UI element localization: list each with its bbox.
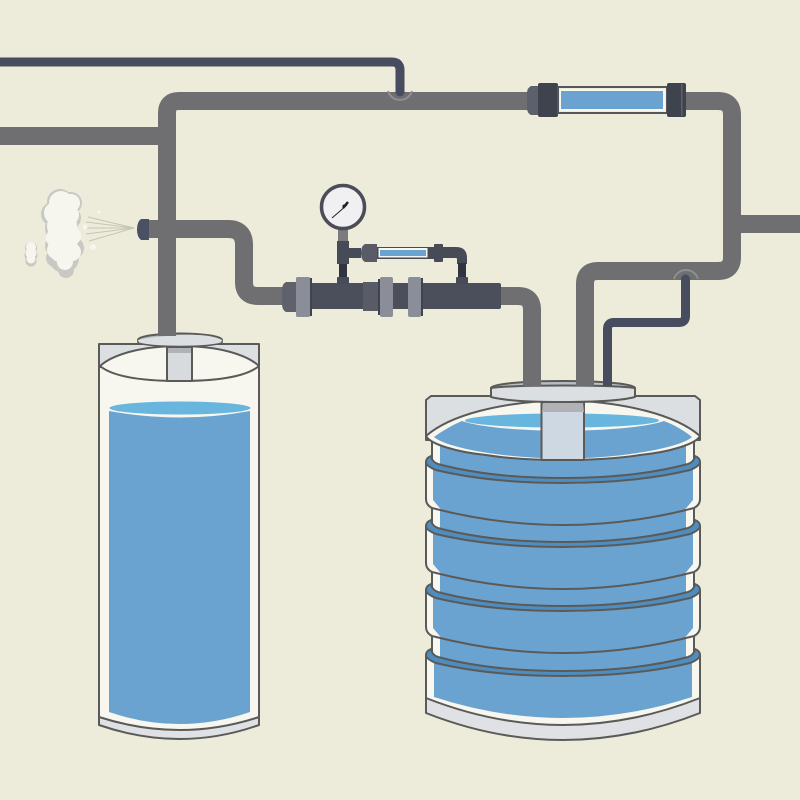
right tank dome water (434, 421, 692, 458)
pipe: right outlet (738, 215, 800, 233)
pipe: upper dark feed line (0, 62, 412, 100)
left tank neck (167, 347, 192, 381)
right tank shoulder (426, 396, 700, 440)
spray lines (82, 210, 134, 250)
middle collar (378, 277, 393, 317)
right tank bottom band (426, 649, 700, 725)
inline flow glass on top pipe (527, 83, 686, 117)
right tank band 3 (426, 584, 700, 653)
steam cloud (41, 189, 84, 278)
valve assembly (282, 277, 501, 317)
right collar (408, 277, 423, 317)
nozzle (137, 219, 149, 240)
gauge dial (322, 186, 364, 228)
left collar (296, 277, 312, 317)
right tank band 2 (426, 520, 700, 589)
left tank water surface (110, 402, 250, 414)
valve main tube (290, 283, 501, 309)
lower nipple (339, 264, 347, 278)
left tank shell (99, 360, 259, 730)
pipe: valve outlet to right tank (495, 296, 532, 384)
left coupling (282, 282, 297, 312)
right tank shell neck (432, 440, 694, 680)
base fitting (337, 277, 349, 284)
pipe: left inlet (0, 127, 160, 145)
pipe: main gray line with left tank riser (167, 101, 732, 384)
small steam puff (24, 242, 38, 266)
left tank cap (138, 325, 222, 346)
pressure gauge branch (322, 186, 364, 284)
left tank (99, 325, 259, 739)
pipe: dark return line to right tank (608, 270, 698, 384)
bypass sight glass (361, 244, 468, 284)
right tank band 1 (426, 456, 700, 525)
left tank shoulder (99, 344, 259, 367)
gauge stem (338, 228, 348, 243)
right tank base plate (426, 698, 700, 740)
right tank dome (426, 400, 700, 460)
right tank water surface (465, 414, 659, 428)
right tank (426, 372, 700, 740)
right tank neck (542, 403, 584, 460)
left tank water body (109, 411, 250, 724)
right tank cap (491, 372, 635, 402)
left tank base plate (99, 712, 259, 739)
pipe: spray branch into valve (147, 229, 290, 296)
middle coupling (363, 282, 380, 311)
left tank dome (100, 346, 259, 381)
tee fitting (337, 241, 361, 264)
